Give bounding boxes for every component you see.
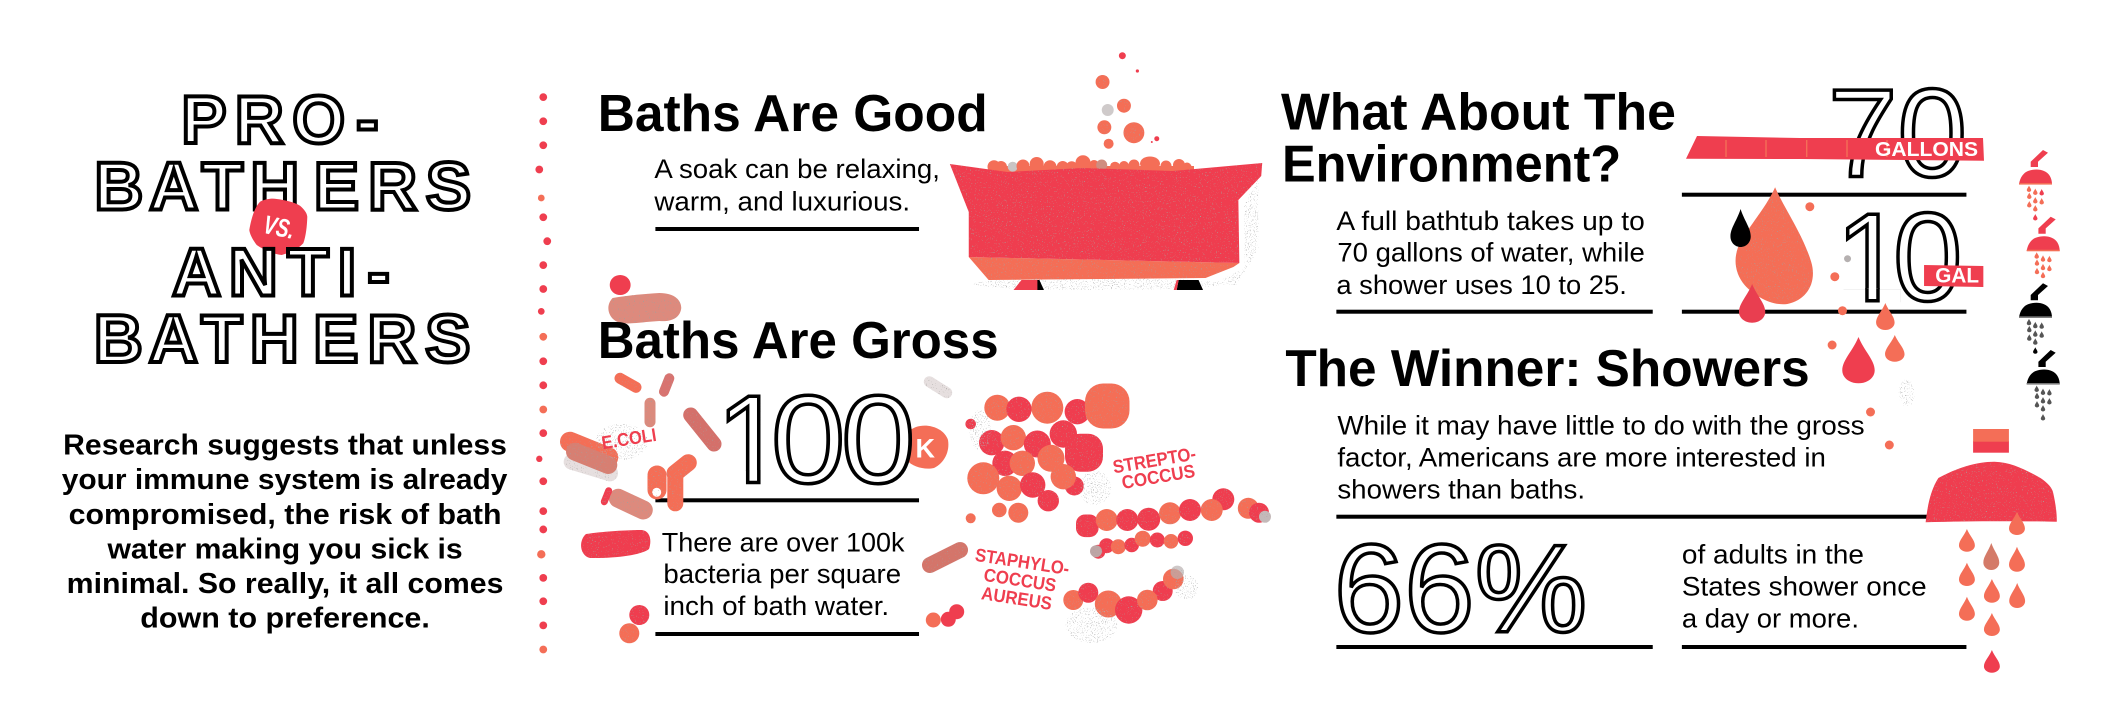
bacteria: streptococcus cluster (965, 384, 1130, 523)
icon: water drops (1730, 187, 1915, 450)
title: anti-bathers: BATHERS (94, 301, 470, 377)
text: bacteria count (662, 528, 905, 621)
label: streptococcus: STREPTO- (1111, 443, 1197, 477)
summary paragraph: Research suggests that unless (63, 429, 507, 461)
label: gallons bar (1686, 136, 1984, 161)
label: staphylococcus aureus: AUREUS (980, 582, 1053, 614)
stipple clouds (969, 410, 1199, 643)
badge: k (904, 426, 948, 469)
bacteria: e. coli rods (570, 378, 960, 643)
heading: baths are good: Baths Are Good (598, 84, 988, 142)
label: e. coli: E.COLI (600, 424, 658, 453)
label: gallons bar: GALLONS (1875, 139, 1978, 161)
right column (1281, 82, 2057, 673)
text: soak description (653, 154, 940, 217)
text: water usage: a shower uses 10 to 25. (1336, 270, 1627, 300)
dotted divider (535, 93, 551, 653)
stat: 100 (716, 370, 915, 510)
text: water usage (1336, 206, 1645, 300)
icon: shower 1 (2019, 150, 2052, 220)
vs badge: VS. (261, 209, 297, 245)
heading: the winner: The Winner: Showers (1285, 339, 1810, 397)
label: k: K (916, 433, 936, 463)
icon: shower 4 (2027, 350, 2060, 420)
heading: what about the environment (1281, 82, 1676, 193)
stat: 66%: 66% (1334, 520, 1587, 659)
heading: baths are gross: Baths Are Gross (598, 311, 999, 369)
text: daily shower share (1682, 539, 1927, 633)
title: pro-bathers: BATHERS (94, 149, 471, 225)
stat: 70: 70 (1828, 64, 1967, 204)
icon: shower 3 (2019, 283, 2052, 354)
icon: large shower head (1926, 429, 2057, 673)
text: daily shower share: a day or more. (1682, 603, 1859, 633)
text: water usage: A full bathtub takes up to (1336, 206, 1645, 236)
text: bacteria count: There are over 100k (662, 528, 905, 558)
stat: 10: 0 (1893, 188, 1962, 328)
icon: sponge blob (608, 275, 681, 323)
summary paragraph (62, 429, 507, 635)
label: gal: GAL (1935, 265, 1979, 288)
text: interest in showers: factor, Americans are more interested in (1337, 443, 1826, 473)
text: interest in showers: While it may have little to do with the gross (1337, 410, 1865, 440)
left column (62, 93, 551, 653)
summary paragraph: water making you sick is (106, 533, 463, 565)
bath foam (988, 155, 1194, 174)
bacteria: small cluster (926, 604, 964, 628)
stat: 100: 0 (841, 370, 915, 510)
middle column (598, 52, 1262, 636)
summary paragraph: compromised, the risk of bath (69, 499, 501, 531)
text: soak description: A soak can be relaxing, (654, 154, 940, 184)
label: streptococcus (1111, 443, 1197, 493)
text: soak description: warm, and luxurious. (653, 187, 910, 217)
title: pro-bathers: PRO- (181, 82, 379, 158)
text: bacteria count: inch of bath water. (663, 591, 889, 621)
label: staphylococcus aureus (974, 544, 1071, 614)
heading: what about the environment: Environment? (1282, 135, 1621, 193)
text: interest in showers (1337, 410, 1865, 504)
summary paragraph: down to preference. (140, 603, 430, 635)
bacteria: lower small chain (1090, 531, 1193, 559)
bubbles above tub (1096, 52, 1159, 149)
text: daily shower share: of adults in the (1682, 539, 1864, 569)
stat: 100: 0 (771, 370, 845, 510)
label: streptococcus: COCCUS (1120, 460, 1196, 493)
text: water usage: 70 gallons of water, while (1337, 238, 1645, 268)
icon: shower 2 (2027, 217, 2060, 278)
stat: 10: 1 (1836, 188, 1905, 328)
summary paragraph: your immune system is already (62, 464, 507, 496)
title: anti-bathers: ANTI- (172, 235, 390, 311)
label: staphylococcus aureus: COCCUS (982, 564, 1058, 596)
summary paragraph: minimal. So really, it all comes (67, 568, 503, 600)
bacteria: upper chain (1076, 488, 1271, 537)
label: staphylococcus aureus: STAPHYLO- (974, 544, 1071, 579)
stipple: e. coli (596, 424, 648, 460)
stat: 10 (1835, 188, 1962, 328)
text: bacteria count: bacteria per square (663, 559, 901, 589)
icon: bathtub (950, 163, 1262, 290)
text: daily shower share: States shower once (1682, 572, 1927, 602)
vs badge (249, 199, 307, 255)
text: interest in showers: showers than baths. (1337, 474, 1585, 504)
bacteria: staphylococcus chain (1063, 566, 1184, 624)
title: anti-bathers (94, 235, 470, 377)
title: pro-bathers (94, 82, 471, 225)
stat: 100: 1 (716, 370, 786, 510)
heading: what about the environment: What About The (1281, 82, 1676, 140)
